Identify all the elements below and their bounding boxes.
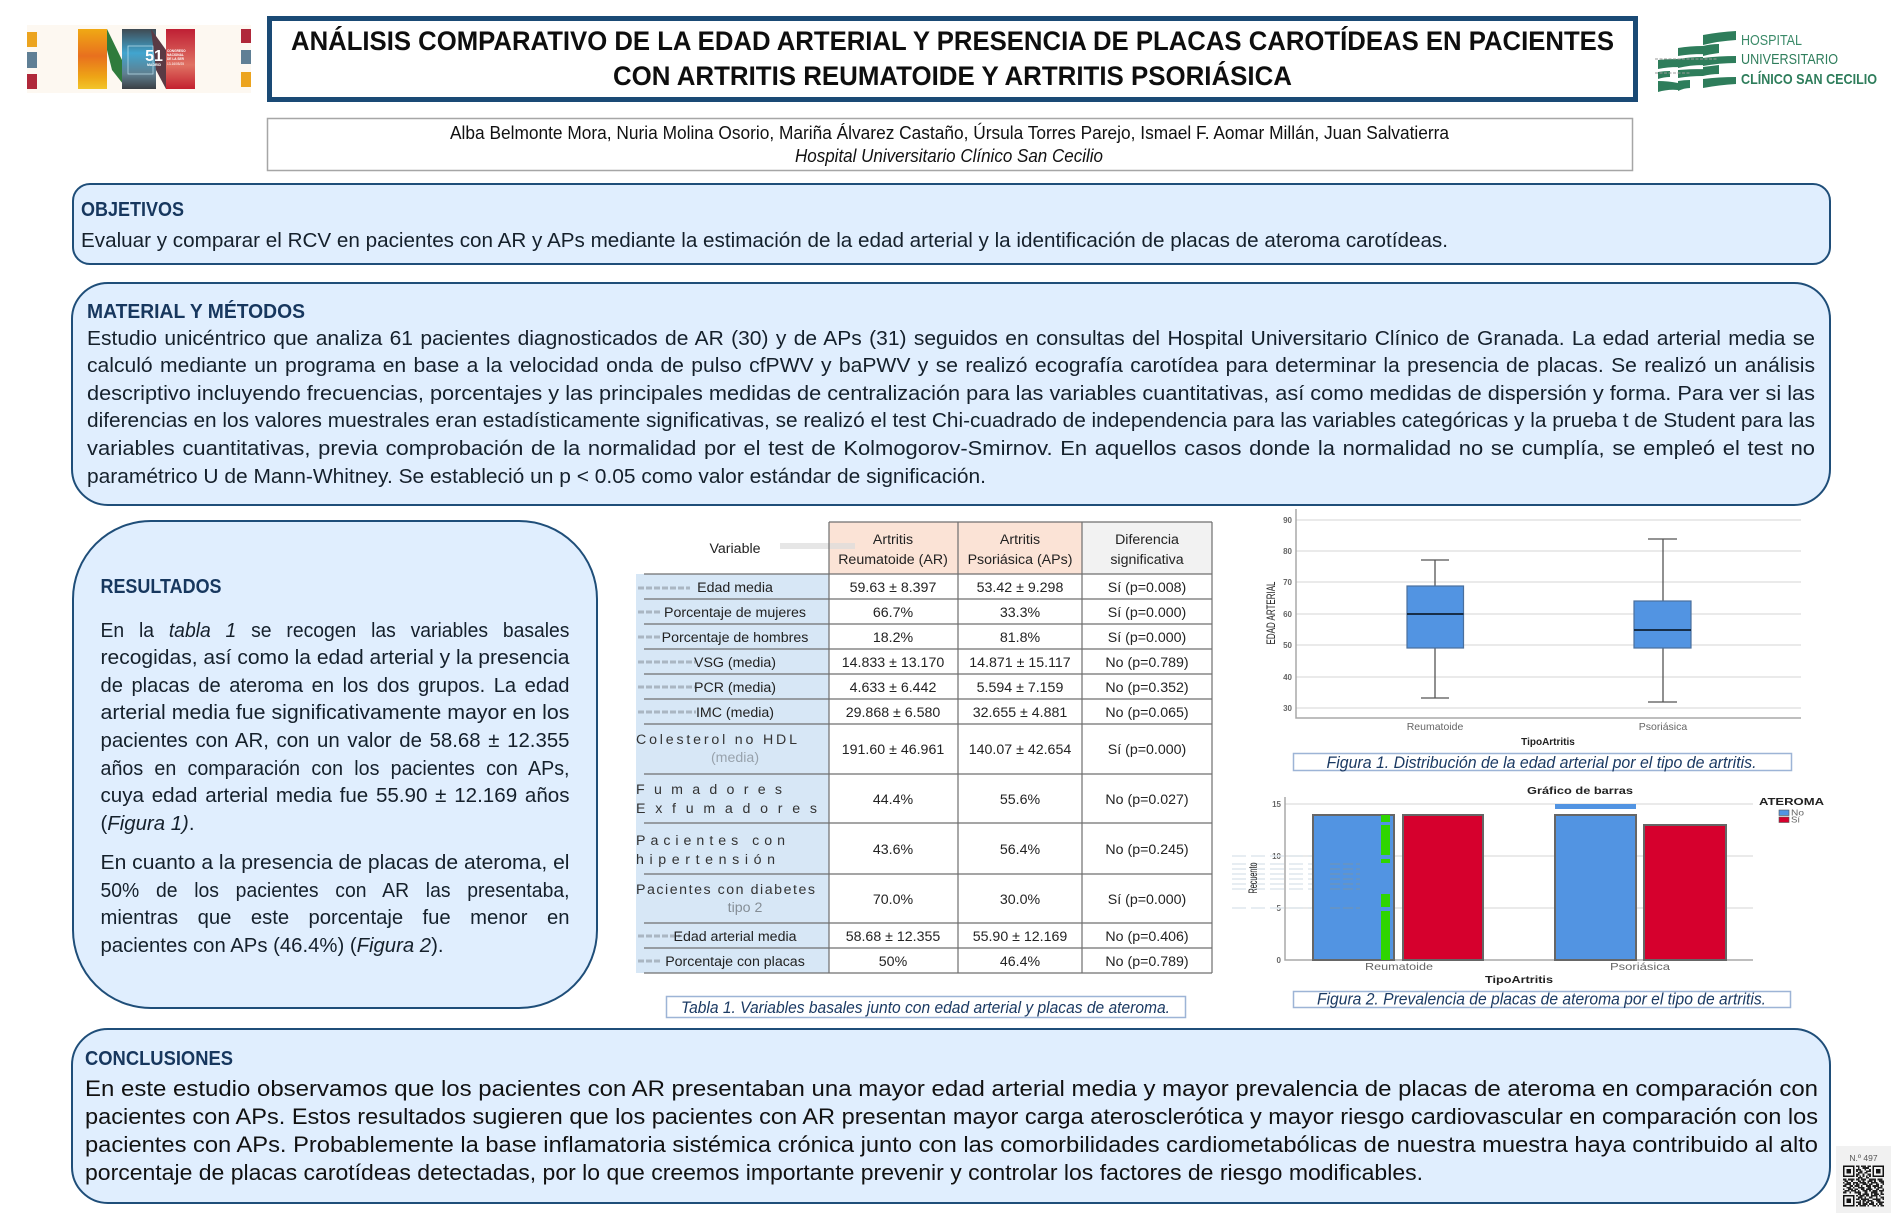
table 1: baseline variables: Reumatoide (AR) [838,552,948,568]
panel: material y métodos: calculó mediante un programa en base a la velocidad onda de pulso cfPWV y baPWV y se realizó ecografía carotídea para determinar la presencia de placas. Se realizó un análisis [87,354,1815,377]
table 1: baseline variables: No (p=0.789) [1105,655,1189,671]
figure 2 caption: Figura 2. Prevalencia de placas de ateroma por el tipo de artritis. [1317,990,1766,1008]
table 1: baseline variables: 18.2% [873,630,913,646]
table 1: baseline variables: Sí (p=0.000) [1108,742,1186,758]
panel: conclusiones: porcentaje de placas carotídeas detectadas, por lo que creemos importante prevenir y controlar los factores de riesgo modificables. [85,1160,1423,1185]
table 1: baseline variables: Edad arterial media [673,929,797,945]
panel: objetivos: OBJETIVOS [81,198,184,221]
chart: bar chart of plaque prevalence: Recuento [1248,862,1260,894]
chart: bar chart of plaque prevalence: 15 [1272,800,1282,809]
logo: 51 congreso SER banner: NACIONAL [167,53,184,57]
table 1: baseline variables: Fumadores [636,782,782,798]
chart: box plot of arterial age: 40 [1283,673,1293,682]
logo: 51 congreso SER banner [27,25,251,93]
panel: material y métodos: diferencias en los valores muestrales eran estadísticamente significativas, se realizó el test Chi-cuadrado de independencia para las variables categóricas y la prueba t de Student para las [87,409,1815,432]
panel: material y métodos [72,283,1830,505]
panel: resultados: pacientes con APs (46.4%) (Figura 2). [100,934,444,957]
chart: box plot of arterial age: 80 [1283,547,1293,556]
authors box [268,118,1632,170]
table 1: baseline variables: Sí (p=0.008) [1108,580,1186,596]
table 1: baseline variables: 14.871 ± 15.117 [969,655,1071,671]
table 1: baseline variables: Psoriásica (APs) [968,552,1072,568]
chart: bar chart of plaque prevalence: 5 [1277,904,1282,913]
table 1: baseline variables: Edad media [697,580,773,596]
chart: bar chart of plaque prevalence [1232,786,1825,986]
chart: box plot of arterial age: 90 [1283,516,1293,525]
table 1: baseline variables: PCR (media) [694,680,776,696]
table 1: baseline variables: 55.90 ± 12.169 [973,929,1067,945]
table 1: baseline variables: Sí (p=0.000) [1108,630,1186,646]
panel: conclusiones: CONCLUSIONES [85,1047,233,1070]
authors box: Hospital Universitario Clínico San Cecilio [795,146,1103,166]
panel: resultados: mientras que este porcentaje fue menor en [100,906,570,929]
panel: conclusiones: En este estudio observamos que los pacientes con AR presentaban una mayor edad arterial media y mayor prevalencia de placas de ateroma en comparación con [85,1076,1818,1101]
table 1: baseline variables: Sí (p=0.000) [1108,892,1186,908]
table 1: baseline variables: Porcentaje de mujeres [664,605,806,621]
table 1: baseline variables: VSG (media) [694,655,776,671]
QR code with poster number [1836,1146,1891,1213]
table 1: baseline variables: No (p=0.245) [1105,842,1189,858]
title: ANÁLISIS COMPARATIVO DE LA EDAD ARTERIAL Y PRESENCIA DE PLACAS CAROTÍDEAS EN PACIENTES [291,25,1614,56]
table 1: baseline variables: 46.4% [1000,954,1040,970]
table 1: baseline variables: 30.0% [1000,892,1040,908]
panel: material y métodos: variables cuantitativas, previa comprobación de la normalidad por el test de Kolmogorov-Smirnov. En aquellos casos donde la normalidad no se cumplía, se empleó el test no [87,437,1815,460]
panel: resultados: RESULTADOS [100,575,222,598]
chart: bar chart of plaque prevalence: Psoriásica [1610,961,1670,973]
table 1: baseline variables: No (p=0.352) [1105,680,1189,696]
table 1: baseline variables: 4.633 ± 6.442 [850,680,936,696]
panel: resultados: arterial media fue significativamente mayor en los [100,701,570,724]
table 1: baseline variables: Variable [710,541,761,557]
chart: bar chart of plaque prevalence: No [1791,808,1805,818]
table 1: baseline variables: tipo 2 [728,900,762,916]
table 1: baseline variables: 29.868 ± 6.580 [846,705,940,721]
logo: 51 congreso SER banner: MADRID [147,63,161,67]
panel: resultados [73,521,597,1008]
table 1: baseline variables: 58.68 ± 12.355 [846,929,940,945]
table 1: baseline variables: 59.63 ± 8.397 [850,580,936,596]
panel: material y métodos: Estudio unicéntrico que analiza 61 pacientes diagnosticados de AR (30) y de APs (31) seguidos en consultas del Hospital Universitario Clínico de Granada. La edad arterial media se [87,327,1815,350]
table 1: baseline variables: hipertensión [636,852,775,868]
panel: resultados: 50% de los pacientes con AR las presentaba, [100,879,570,902]
chart: box plot of arterial age: EDAD ARTERIAL [1266,581,1278,644]
panel: conclusiones [72,1029,1830,1203]
table 1: baseline variables: significativa [1110,552,1184,568]
table 1: baseline variables: 32.655 ± 4.881 [973,705,1067,721]
chart: box plot of arterial age [1266,509,1801,748]
panel: conclusiones: pacientes con APs. Estos resultados sugieren que los pacientes con AR presentan mayor carga aterosclerótica y mayor riesgo cardiovascular en comparación con los [85,1104,1818,1129]
logo: 51 congreso SER banner: DE LA SER [167,57,185,61]
chart: bar chart of plaque prevalence: 0 [1277,956,1282,965]
table 1: baseline variables: 70.0% [873,892,913,908]
table 1: baseline variables: No (p=0.027) [1105,792,1189,808]
panel: material y métodos: descriptivo incluyendo frecuencias, porcentajes y las principales medidas de centralización para las variables cuantitativas, así como medidas de dispersión y forma. Para ver si las [87,382,1815,405]
logo: Hospital Universitario Clínico San Cecilio: HOSPITAL [1741,32,1802,49]
panel: resultados: (Figura 1). [100,812,195,835]
chart: bar chart of plaque prevalence: TipoArtritis [1485,975,1554,986]
panel: resultados: años en comparación con los pacientes con APs, [100,757,570,780]
authors box: Alba Belmonte Mora, Nuria Molina Osorio, Mariña Álvarez Castaño, Úrsula Torres Parejo, Ismael F. Aomar Millán, Juan Salvatierra [450,122,1450,143]
logo: 51 congreso SER banner: 51 [145,48,163,65]
table 1: baseline variables: 53.42 ± 9.298 [977,580,1063,596]
chart: bar chart of plaque prevalence: ATEROMA [1759,796,1825,808]
table 1: baseline variables: Porcentaje de hombres [662,630,808,646]
panel: resultados: pacientes con AR, con un valor de 58.68 ± 12.355 [100,729,570,752]
table 1: baseline variables: 56.4% [1000,842,1040,858]
panel: objetivos: Evaluar y comparar el RCV en pacientes con AR y APs mediante la estimación de la edad arterial y la identificación de placas de ateroma carotídeas. [81,229,1448,252]
panel: conclusiones: pacientes con APs. Probablemente la base inflamatoria sistémica crónica junto con las comorbilidades cardiometabólicas de nuestra muestra haya contribuido al alto [85,1132,1818,1157]
title: CON ARTRITIS REUMATOIDE Y ARTRITIS PSORIÁSICA [613,60,1292,91]
panel: resultados: cuya edad arterial media fue 55.90 ± 12.169 años [100,784,570,807]
table 1: baseline variables: 191.60 ± 46.961 [842,742,944,758]
panel: material y métodos: MATERIAL Y MÉTODOS [87,300,305,323]
chart: box plot of arterial age: Reumatoide [1407,721,1463,733]
table caption: Tabla 1. Variables basales junto con edad arterial y placas de ateroma. [681,999,1170,1017]
panel: resultados: En cuanto a la presencia de placas de ateroma, el [100,851,570,874]
table 1: baseline variables: Pacientes con [636,833,785,849]
chart: bar chart of plaque prevalence: Gráfico de barras [1527,786,1634,797]
table 1: baseline variables: IMC (media) [696,705,774,721]
title [270,18,1636,100]
table 1: baseline variables: Pacientes con diabetes [636,882,815,898]
table 1: baseline variables: 33.3% [1000,605,1040,621]
chart: box plot of arterial age: 70 [1283,578,1293,587]
panel: objetivos [73,184,1830,264]
table 1: baseline variables: 14.833 ± 13.170 [842,655,944,671]
chart: box plot of arterial age: 50 [1283,641,1293,650]
table 1: baseline variables: 55.6% [1000,792,1040,808]
table 1: baseline variables: 140.07 ± 42.654 [969,742,1071,758]
table 1: baseline variables: Exfumadores [636,801,817,817]
panel: resultados: recogidas, así como la edad arterial y la presencia [100,646,570,669]
table 1: baseline variables: Artritis [1000,532,1040,548]
table 1: baseline variables: 50% [879,954,908,970]
table 1: baseline variables: No (p=0.789) [1105,954,1189,970]
chart: box plot of arterial age: 30 [1283,704,1293,713]
table 1: baseline variables: No (p=0.406) [1105,929,1189,945]
logo: Hospital Universitario Clínico San Cecilio [1655,31,1877,92]
chart: box plot of arterial age: 60 [1283,610,1293,619]
panel: resultados: En la tabla 1 se recogen las variables basales [100,619,570,642]
chart: bar chart of plaque prevalence: Sí [1791,816,1801,824]
table 1: baseline variables: 81.8% [1000,630,1040,646]
table 1: baseline variables: (media) [711,750,759,766]
QR code with poster number: N.º 497 [1849,1153,1878,1163]
chart: box plot of arterial age: TipoArtritis [1521,737,1575,748]
panel: resultados: de placas de ateroma en los dos grupos. La edad [100,674,570,697]
table 1: baseline variables: Porcentaje con placas [665,954,805,970]
panel: material y métodos: paramétrico U de Mann-Whitney. Se estableció un p < 0.05 como valor estándar de significación. [87,465,986,488]
chart: bar chart of plaque prevalence: Reumatoide [1365,961,1433,973]
table 1: baseline variables: 66.7% [873,605,913,621]
table 1: baseline variables: Artritis [873,532,913,548]
table 1: baseline variables: 43.6% [873,842,913,858]
table 1: baseline variables: Diferencia [1115,532,1179,548]
figure 1 caption: Figura 1. Distribución de la edad arterial por el tipo de artritis. [1326,754,1756,772]
table 1: baseline variables [636,522,1212,973]
table 1: baseline variables: Colesterol no HDL [636,732,797,748]
logo: Hospital Universitario Clínico San Cecilio: CLÍNICO SAN CECILIO [1741,71,1877,88]
table 1: baseline variables: 44.4% [873,792,913,808]
logo: 51 congreso SER banner: CONGRESO [167,49,186,53]
table 1: baseline variables: No (p=0.065) [1105,705,1189,721]
logo: Hospital Universitario Clínico San Cecilio: UNIVERSITARIO [1741,51,1838,68]
chart: box plot of arterial age: Psoriásica [1639,721,1687,733]
table 1: baseline variables: 5.594 ± 7.159 [977,680,1063,696]
logo: 51 congreso SER banner: 13-16/05/25 [167,62,184,66]
table 1: baseline variables: Sí (p=0.000) [1108,605,1186,621]
chart: bar chart of plaque prevalence: 10 [1272,852,1282,861]
